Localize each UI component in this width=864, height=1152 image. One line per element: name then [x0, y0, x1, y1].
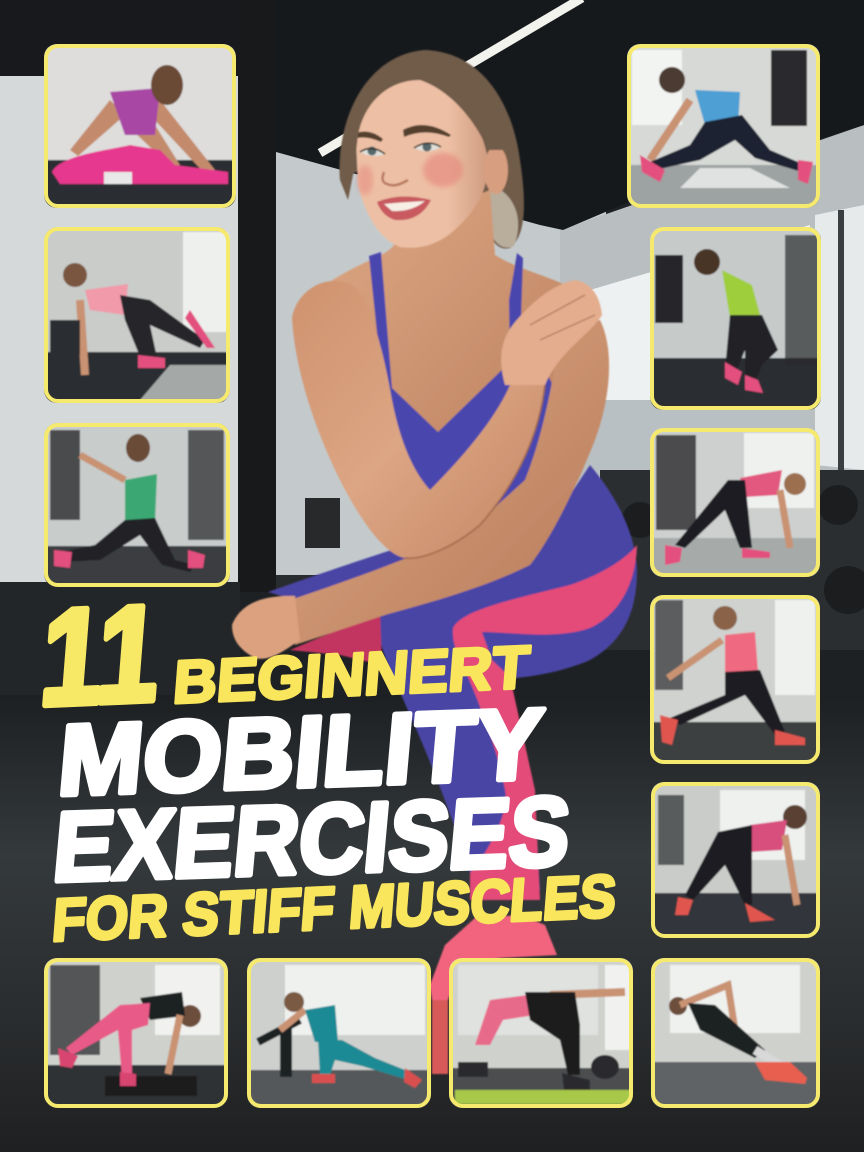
eyes — [360, 144, 441, 156]
exercise photo 1 — [44, 44, 236, 208]
exercise photo 3 — [44, 423, 230, 587]
word mobility: MOBILITY — [54, 688, 548, 817]
eyebrows — [356, 125, 451, 142]
exercise photo 8 — [651, 782, 820, 938]
leggings — [268, 465, 637, 890]
face — [356, 80, 488, 248]
subtitle: FOR STIFF MUSCLES — [50, 861, 619, 954]
hand on shoulder — [501, 280, 602, 385]
hair front — [340, 50, 508, 200]
exercise photo 6 — [650, 428, 820, 577]
ear — [484, 146, 508, 194]
front arm — [292, 281, 545, 558]
far thigh — [290, 612, 382, 665]
exercise photo 11 — [449, 958, 633, 1108]
ponytail — [485, 185, 518, 247]
back arm — [290, 320, 609, 645]
exercise photo 12 — [651, 958, 820, 1108]
exercise photo 7 — [650, 595, 820, 764]
word beginnert: BEGINNERT — [171, 632, 532, 716]
title — [36, 576, 619, 954]
pink leggings stripe — [453, 545, 637, 900]
nose — [383, 172, 408, 185]
exercise photo 5 — [650, 227, 821, 410]
hair back — [340, 50, 524, 249]
exercise photo 9 — [44, 958, 228, 1108]
smile — [377, 196, 431, 220]
central woman stretching — [232, 50, 637, 1074]
exercise photo 4 — [627, 44, 820, 208]
cheek blush — [423, 153, 463, 187]
exercise photo 10 — [247, 958, 431, 1108]
word exercises: EXERCISES — [49, 776, 575, 902]
number 11: 11 — [36, 576, 166, 734]
pink shoe — [430, 915, 557, 1000]
purple tank top — [369, 252, 585, 530]
exercise photo 2 — [44, 227, 230, 403]
hand on knee — [232, 596, 300, 659]
torso — [300, 190, 609, 525]
